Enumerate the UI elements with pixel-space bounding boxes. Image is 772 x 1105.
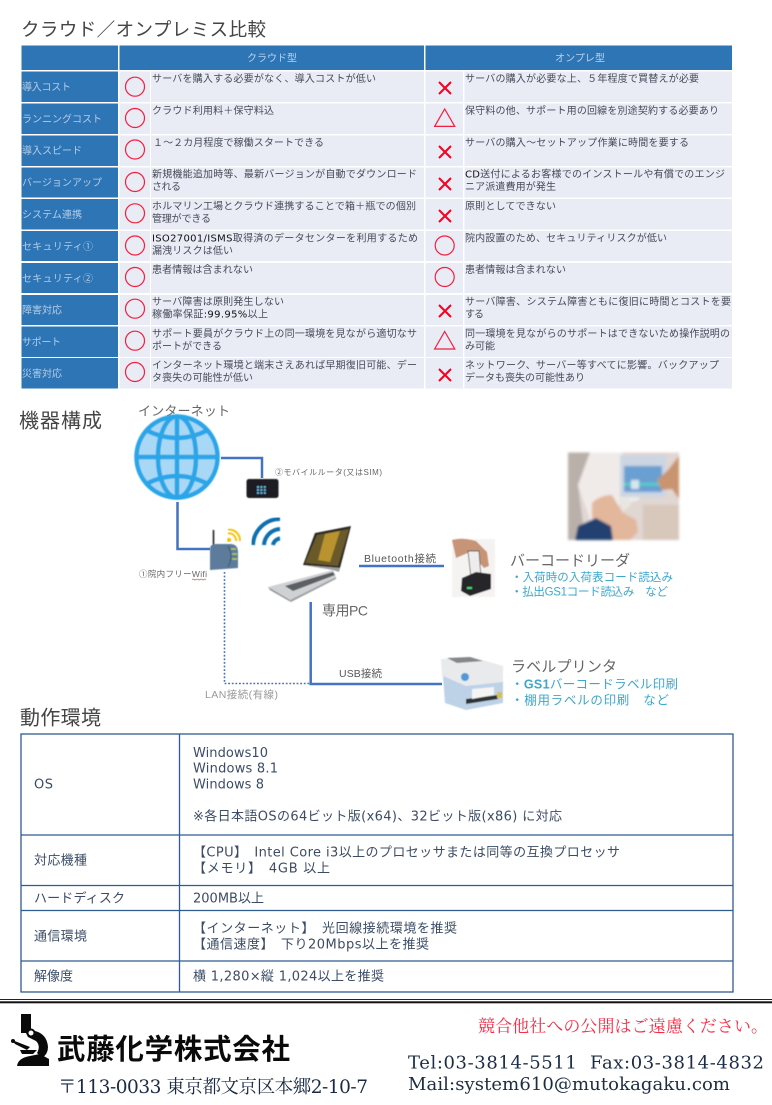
label: 導入スピード	[22, 142, 82, 157]
text: label printer uses	[511, 678, 678, 708]
specs	[193, 844, 620, 876]
cloud text: 管理ができる	[152, 212, 211, 225]
row: resolution: 解像度	[34, 968, 73, 984]
on-premise text: データも喪失の可能性あり	[465, 371, 585, 384]
on-premise text	[465, 327, 730, 352]
row: deployment speed	[22, 136, 732, 166]
icon: cross	[439, 305, 451, 317]
connector: Bluetooth line	[359, 565, 444, 567]
label: 導入コスト	[22, 78, 71, 94]
text: barcode reader uses	[511, 570, 673, 598]
header: cloud type: クラウド型	[247, 50, 297, 64]
cloud text: サポート要員がクラウド上の同一環境を見ながら適切なサ	[152, 327, 417, 340]
icon: cross	[439, 210, 451, 222]
panel: network diagram	[136, 404, 679, 710]
cloud text: ポートができる	[152, 339, 222, 352]
label: セキュリティ①	[22, 238, 93, 253]
label: barcode reader: バーコードリーダ	[510, 552, 630, 570]
label: 災害対応	[22, 365, 62, 380]
cloud text: クラウド利用料＋保守料込	[152, 104, 274, 117]
on-premise text: 院内設置のため、セキュリティリスクが低い	[465, 231, 667, 244]
cloud text: される	[152, 181, 181, 193]
text: label printer uses: ・GS1バーコードラベル印刷	[511, 678, 678, 692]
cloud text: 患者情報は含まれない	[152, 263, 253, 276]
label: LAN connection: LAN接続(有線)	[205, 688, 278, 701]
label: サポート	[22, 334, 61, 348]
contact details: Mail:system610@mutokagaku.com	[408, 1074, 730, 1095]
text: label printer uses: ・棚用ラベルの印刷 など	[511, 692, 669, 708]
label: セキュリティ②	[22, 270, 93, 285]
company address: 〒113-0033 東京都文京区本郷2-10-7	[58, 1076, 368, 1098]
cloud text: タ喪失の可能性が低い	[152, 371, 253, 384]
icon: wifi router	[210, 530, 238, 570]
values	[193, 920, 457, 952]
OS list: Windows 8.1	[193, 762, 278, 776]
notice: do not disclose to competitors: 競合他社への公開はご遠慮ください。	[478, 1017, 768, 1036]
icon: circle	[126, 236, 144, 255]
on-premise text: 同一環境を見ながらのサポートはできないため操作説明の	[465, 327, 730, 340]
icon: yellow wifi signal	[228, 529, 240, 541]
text: barcode reader uses: ・払出GS1コード読込み など	[511, 584, 668, 598]
on-premise text: する	[465, 308, 484, 320]
row: resolution	[34, 968, 384, 984]
icon: circle	[126, 108, 144, 128]
heading: equipment configuration: 機器構成	[19, 410, 102, 432]
photo: barcode reader	[452, 539, 495, 597]
row: security 2	[22, 263, 732, 293]
cloud text	[152, 199, 416, 225]
label: dedicated PC: 専用PC	[322, 602, 368, 618]
specs: 【メモリ】 4GB 以上	[193, 862, 330, 876]
row: security 1	[22, 231, 732, 261]
cloud text: ホルマリン工場とクラウド連携することで箱＋瓶での個別	[152, 199, 416, 212]
row: OS: OS	[34, 778, 53, 792]
contact details: Tel:03-3814-5511 Fax:03-3814-4832	[408, 1052, 764, 1074]
row: version up	[22, 167, 732, 198]
cloud text: インターネット環境と端末さえあれば早期復旧可能、デー	[152, 358, 417, 371]
photo: label printer	[441, 657, 503, 710]
values: 【通信速度】 下り20Mbps以上を推奨	[193, 936, 429, 952]
row: supported models: 対応機種	[34, 852, 87, 868]
cloud text: 新規機能追加時等、最新バージョンが自動でダウンロード	[152, 167, 417, 180]
connector: internet to mobile router	[221, 458, 262, 478]
heading: operating environment: 動作環境	[20, 706, 101, 730]
cloud text	[152, 327, 417, 352]
footer divider: double rule	[0, 999, 772, 1003]
icon: cross	[439, 146, 451, 158]
value: 200MB以上	[193, 892, 264, 906]
icon: mobile router	[246, 479, 278, 498]
icon: circle	[126, 172, 144, 192]
cloud text	[152, 231, 418, 257]
label: label printer: ラベルプリンタ	[511, 658, 617, 676]
values: 【インターネット】 光回線接続環境を推奨	[193, 920, 457, 936]
row: support	[22, 326, 732, 357]
icon: circle	[126, 140, 144, 159]
cloud text: 稼働率保証:99.95%以上	[152, 307, 268, 320]
connector: LAN dotted line	[224, 572, 310, 684]
row: supported models	[34, 844, 620, 876]
OS list: Windows 8	[193, 778, 264, 792]
row: disaster response	[22, 358, 732, 388]
text: barcode reader uses: ・入荷時の入荷表コード読込み	[511, 570, 673, 584]
cloud text	[152, 167, 417, 193]
photo: scanning a badge	[568, 452, 679, 540]
OS list: Windows10	[193, 746, 268, 761]
label: in-clinic free wifi: ①院内フリーWifi	[139, 569, 207, 579]
cloud text	[152, 295, 284, 320]
label: USB connection: USB接続	[339, 667, 382, 680]
icon: circle	[126, 268, 144, 286]
on-premise text	[465, 167, 725, 193]
icon: circle	[126, 331, 144, 350]
row: network: 通信環境	[34, 928, 87, 944]
row: system integration	[22, 199, 732, 230]
on-premise text: サーバの購入が必要な上、５年程度で買替えが必要	[465, 72, 699, 85]
icon: circle	[126, 77, 144, 96]
icon: blue wifi waves	[253, 519, 280, 545]
on-premise text: ネットワーク、サーバー等すべてに影響。バックアップ	[465, 358, 719, 371]
table header row	[22, 46, 732, 70]
icon: cross	[439, 82, 451, 94]
OS list: ※各日本語OSの64ビット版(x64)、32ビット版(x86) に対応	[193, 808, 562, 824]
row: hard disk: ハードディスク	[34, 890, 125, 906]
panel: comparison table	[22, 46, 732, 388]
on-premise text: 患者情報は含まれない	[465, 263, 566, 276]
row: failure response	[22, 295, 732, 325]
connector: USB line	[311, 602, 442, 684]
label: Bluetooth connection: Bluetooth接続	[364, 552, 436, 565]
row: OS	[34, 746, 562, 824]
on-premise text: 保守料の他、サポート用の回線を別途契約する必要あり	[465, 104, 719, 117]
icon: triangle	[435, 332, 455, 349]
label: バージョンアップ	[22, 174, 102, 189]
header: on-premise type: オンプレ型	[555, 50, 605, 64]
on-premise text: み可能	[465, 339, 495, 352]
cloud text	[152, 358, 417, 384]
OS list	[193, 746, 562, 824]
label: internet: インターネット	[138, 404, 230, 418]
on-premise text: サーバの購入～セットアップ作業に時間を要する	[465, 136, 689, 149]
icon: laptop	[268, 526, 351, 602]
company name: 武藤化学株式会社	[57, 1034, 290, 1066]
icon: circle	[126, 362, 144, 382]
connector: internet to wifi router	[178, 502, 210, 549]
icon: microscope logo	[11, 1014, 49, 1066]
label: ランニングコスト	[22, 110, 102, 126]
on-premise text	[465, 358, 719, 384]
on-premise text: サーバ障害、システム障害ともに復旧に時間とコストを要	[465, 295, 731, 308]
label: 障害対応	[22, 302, 62, 316]
icon: triangle	[435, 109, 455, 126]
value: 横 1,280×縦 1,024以上を推奨	[193, 970, 384, 984]
panel: operating environment table	[21, 734, 733, 992]
contact details	[408, 1052, 764, 1095]
label: mobile router: ②モバイルルータ(又はSIM)	[275, 468, 382, 477]
icon: circle	[126, 299, 144, 318]
specs: 【CPU】 Intel Core i3以上のプロセッサまたは同等の互換プロセッサ	[193, 844, 620, 860]
icon: circle	[435, 268, 454, 286]
icon: circle	[126, 204, 144, 223]
cloud text: サーバを購入する必要がなく、導入コストが低い	[152, 72, 376, 85]
row: running cost	[22, 104, 732, 134]
on-premise text: 原則としてできない	[465, 200, 556, 212]
on-premise text: CD送付によるお客様でのインストールや有償でのエンジ	[465, 167, 725, 180]
label: システム連携	[22, 206, 82, 221]
row: network	[34, 920, 457, 952]
icon: cross	[439, 178, 451, 190]
cloud text: サーバ障害は原則発生しない	[152, 295, 284, 308]
icon: circle	[435, 236, 454, 255]
cloud text: ISO27001/ISMS取得済のデータセンターを利用するため	[152, 231, 418, 244]
icon: cross	[439, 369, 451, 381]
on-premise text: ニア派遣費用が発生	[465, 180, 556, 193]
cloud text: 漏洩リスクは低い	[152, 244, 233, 257]
title: cloud vs on-premise comparison: クラウド／オンプレミス比較	[21, 19, 266, 40]
row: hard disk	[34, 890, 264, 906]
row: initial cost	[22, 72, 732, 102]
on-premise text	[465, 295, 731, 320]
cloud text: １～２カ月程度で稼働スタートできる	[153, 136, 324, 149]
icon: globe	[136, 416, 218, 498]
